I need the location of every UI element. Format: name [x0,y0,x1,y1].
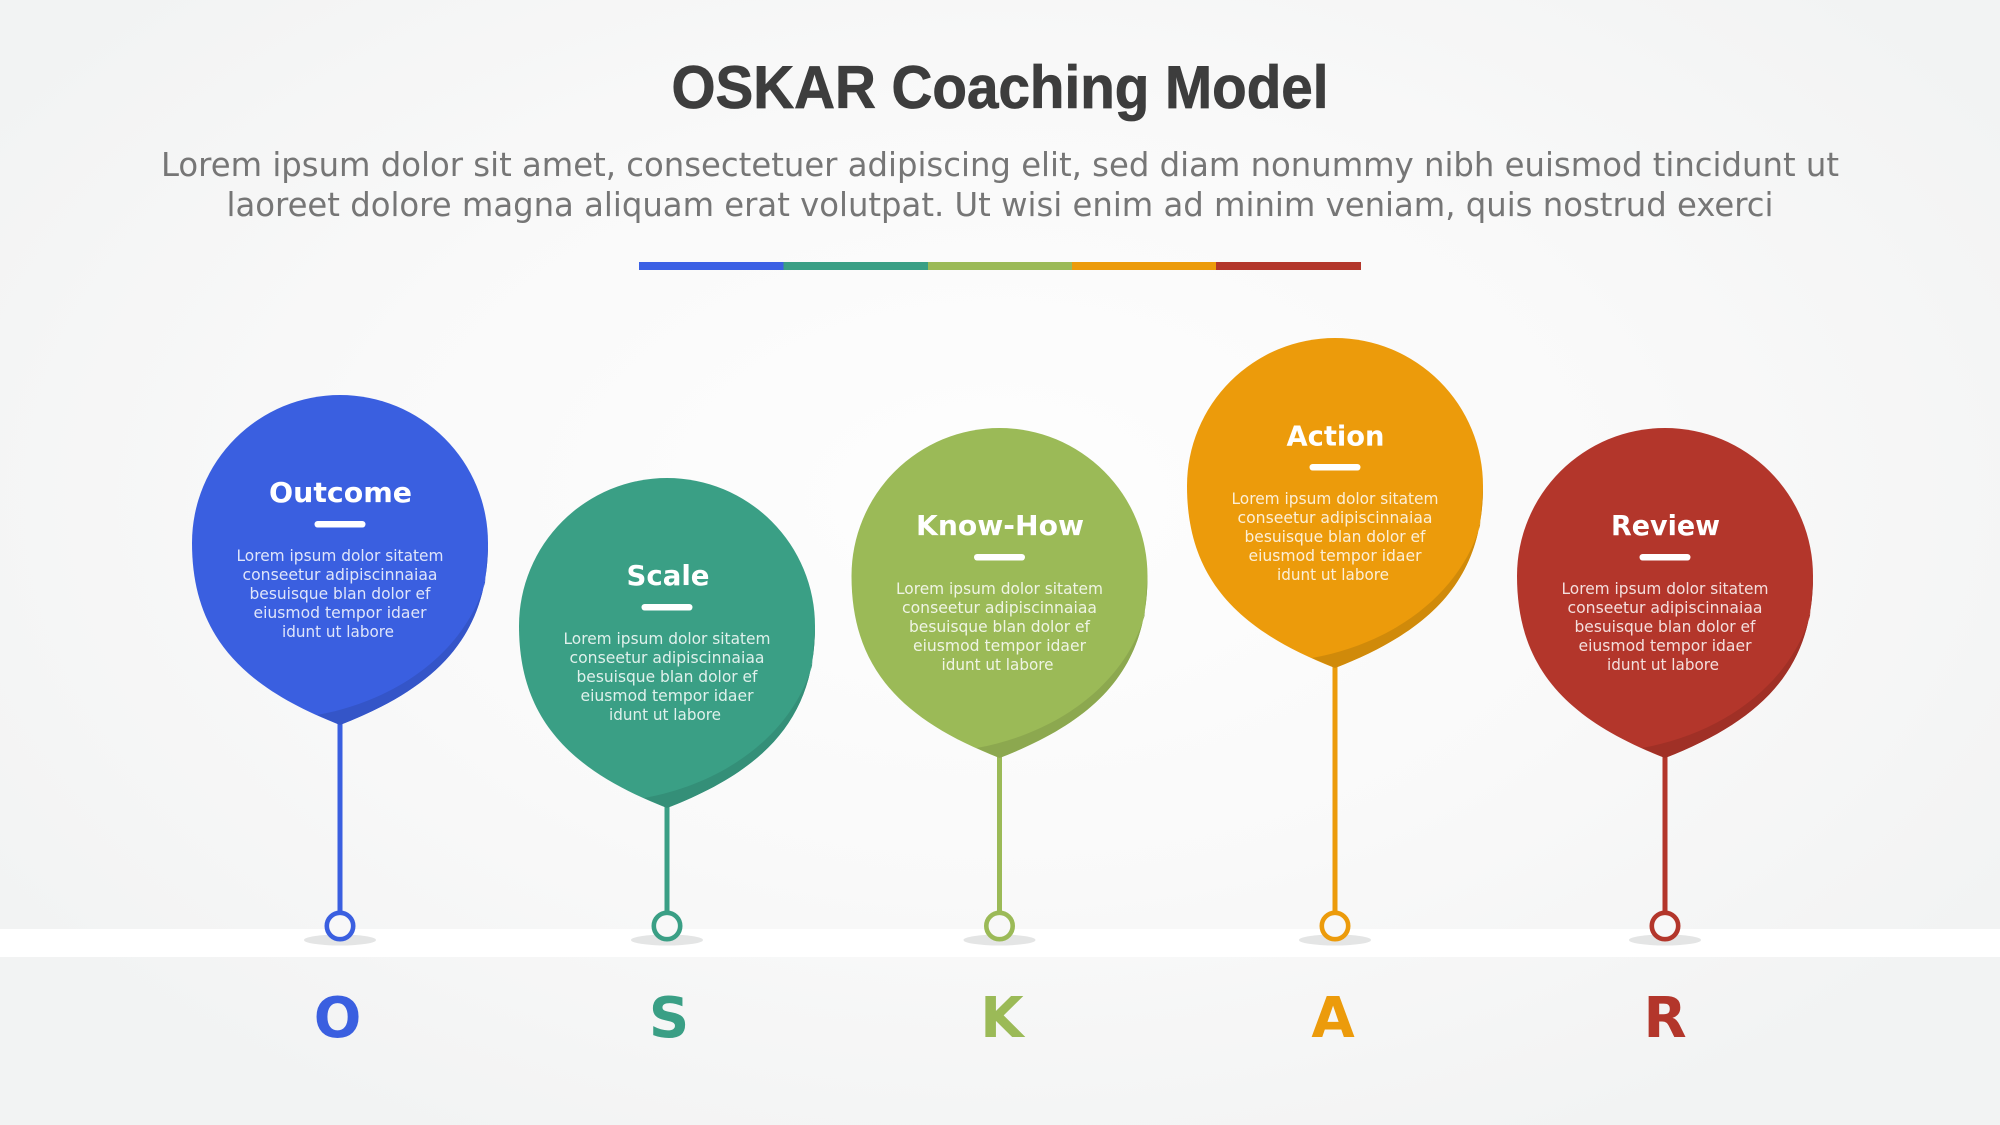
balloon shade [644,626,815,808]
body text: eiusmod tempor idaer [580,686,754,705]
panel: Action [1187,338,1483,946]
letter R: R [1643,986,1687,1051]
body text: idunt ut labore [942,655,1054,674]
letter K: K [980,986,1026,1051]
body text: eiusmod tempor idaer [1578,636,1752,655]
title: OSKAR Coaching Model [672,54,1328,121]
body text: idunt ut labore [1277,565,1389,584]
subtitle: Lorem ipsum dolor sit amet, consectetuer adipiscing elit, sed diam nonummy nibh euismod tincidunt ut [161,145,1839,184]
heading: Action [1286,420,1384,452]
letter O: O [314,986,361,1051]
body text: idunt ut labore [282,622,394,641]
balloon shape [192,395,488,725]
stem and marker [964,753,1036,946]
letter S: S [649,986,689,1051]
dash [642,604,692,610]
body text: besuisque blan dolor ef [576,667,758,686]
body text [236,546,444,641]
floor band [0,929,2000,957]
panel: Outcome [192,395,488,946]
body text: besuisque blan dolor ef [909,617,1090,636]
balloon shape [852,428,1148,758]
body text: eiusmod tempor idaer [254,603,427,622]
panel: Know-How [852,428,1148,946]
body text: idunt ut labore [609,705,721,724]
body text: idunt ut labore [1607,655,1719,674]
body text: eiusmod tempor idaer [1248,546,1422,565]
panel: Review [1517,428,1813,946]
balloon shape [1187,338,1483,668]
dash [1640,554,1690,560]
subtitle: laoreet dolore magna aliquam erat volutpat. Ut wisi enim ad minim veniam, quis nostrud exerci [226,185,1774,224]
body text: besuisque blan dolor ef [250,584,431,603]
balloon shade [1642,576,1813,758]
balloon shade [1312,486,1483,668]
dash [974,554,1025,560]
stem and marker [631,803,703,946]
dash [1310,464,1360,470]
body text: besuisque blan dolor ef [1244,527,1426,546]
subtitle [161,145,1839,224]
body text [1232,489,1438,584]
stem and marker [1299,663,1371,946]
heading: Know-How [916,509,1084,542]
body text: Lorem ipsum dolor sitatem [1562,579,1768,598]
stem and marker [1629,753,1701,946]
body text [1562,579,1768,674]
body text: conseetur adipiscinnaiaa [1568,598,1762,617]
body text: Lorem ipsum dolor sitatem [564,629,770,648]
body text: conseetur adipiscinnaiaa [570,648,764,667]
colour divider bar [639,262,1361,270]
body text: Lorem ipsum dolor sitatem [1232,489,1438,508]
letter A: A [1311,986,1355,1051]
body text: conseetur adipiscinnaiaa [242,565,438,584]
heading: Outcome [269,476,412,509]
body text: Lorem ipsum dolor sitatem [236,546,444,565]
heading: Scale [626,559,710,592]
balloon shade [317,543,488,725]
body text: conseetur adipiscinnaiaa [1238,508,1432,527]
heading: Review [1611,509,1720,542]
body text: besuisque blan dolor ef [1574,617,1756,636]
balloon shape [519,478,815,808]
body text: eiusmod tempor idaer [913,636,1086,655]
body text [896,579,1103,674]
body text: Lorem ipsum dolor sitatem [896,579,1103,598]
body text: conseetur adipiscinnaiaa [902,598,1097,617]
balloon shade [976,576,1148,758]
panel: Scale [519,478,815,946]
balloon shape [1517,428,1813,758]
body text [564,629,770,724]
stem and marker [304,720,376,946]
dash [314,521,366,528]
